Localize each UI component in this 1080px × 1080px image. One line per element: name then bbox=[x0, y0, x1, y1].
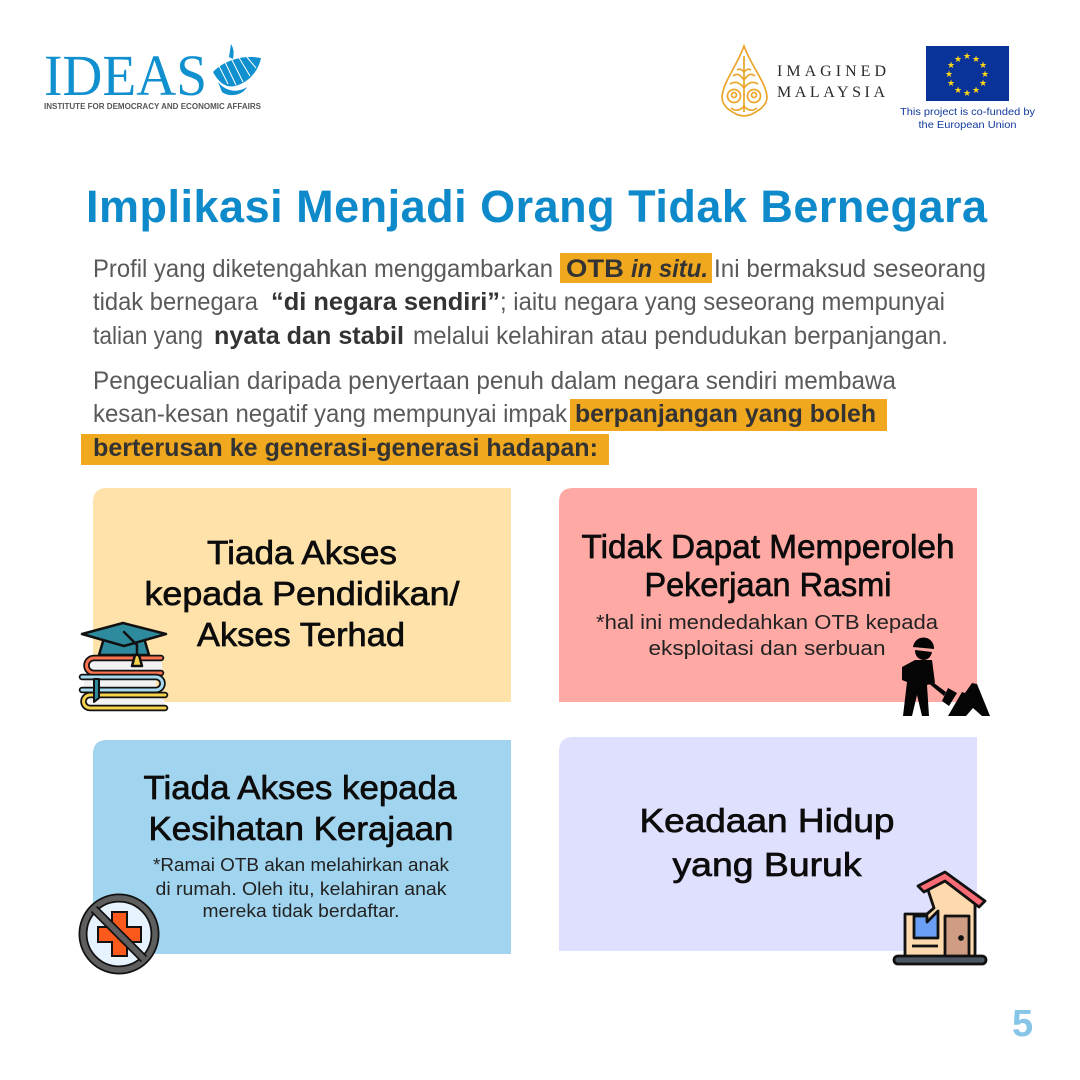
logo: Imagined Malaysia bbox=[722, 46, 886, 116]
logo: Imagined Malaysia: MALAYSIA bbox=[777, 84, 885, 101]
panel: healthcare bbox=[83, 740, 511, 970]
text: EU co-funding note: the European Union bbox=[918, 119, 1017, 131]
text block: intro paragraph: OTB bbox=[566, 255, 624, 283]
note: home births: *Ramai OTB akan melahirkan anak bbox=[153, 855, 450, 875]
text: EU co-funding note: This project is co-funded by bbox=[900, 106, 1036, 118]
icon: EU stars: ★ bbox=[945, 69, 953, 79]
logo: Imagined Malaysia: IMAGINED bbox=[777, 63, 886, 80]
heading: education: kepada Pendidikan/ bbox=[144, 575, 460, 612]
text block: exclusion paragraph: Pengecualian daripada penyertaan penuh dalam negara sendiri membawa bbox=[93, 367, 896, 395]
text block: intro paragraph bbox=[93, 253, 986, 350]
title: Implikasi Menjadi Orang Tidak Bernegara bbox=[86, 181, 988, 232]
icon: EU stars: ★ bbox=[963, 51, 971, 61]
note: exploitation: eksploitasi dan serbuan bbox=[648, 638, 886, 660]
heading: healthcare: Kesihatan Kerajaan bbox=[148, 810, 454, 847]
heading: education: Akses Terhad bbox=[197, 616, 405, 653]
heading: living conditions: yang Buruk bbox=[672, 846, 862, 883]
panel: employment bbox=[559, 488, 990, 716]
text block: intro paragraph: ; iaitu negara yang seseorang mempunyai bbox=[500, 288, 945, 316]
icon: golden wayang leaf bbox=[722, 46, 767, 116]
text block: intro paragraph: in situ. bbox=[631, 255, 708, 283]
icon: EU stars bbox=[945, 51, 989, 98]
text block: exclusion paragraph: berterusan ke generasi-generasi hadapan: bbox=[93, 434, 598, 462]
panel: living conditions bbox=[559, 737, 986, 964]
highlight: OTB in situ bbox=[560, 253, 712, 283]
text block: intro paragraph: melalui kelahiran atau pendudukan berpanjangan. bbox=[413, 322, 948, 350]
icon: EU stars: ★ bbox=[963, 88, 971, 98]
highlight: lasting impact bbox=[81, 399, 887, 465]
heading: education bbox=[144, 534, 460, 653]
heading: healthcare bbox=[144, 769, 457, 847]
note: home births: di rumah. Oleh itu, kelahiran anak bbox=[156, 879, 448, 899]
note: home births bbox=[153, 855, 450, 921]
logo: IDEAS: INSTITUTE FOR DEMOCRACY AND ECONOMIC AFFAIRS bbox=[44, 102, 262, 111]
icon: EU stars: ★ bbox=[972, 85, 980, 95]
icon: EU stars: ★ bbox=[954, 85, 962, 95]
heading: living conditions: Keadaan Hidup bbox=[640, 802, 894, 839]
heading: employment: Tidak Dapat Memperoleh bbox=[582, 528, 954, 565]
note: home births: mereka tidak berdaftar. bbox=[202, 901, 400, 921]
text block: exclusion paragraph: berpanjangan yang boleh bbox=[575, 400, 876, 428]
text block: exclusion paragraph: kesan-kesan negatif yang mempunyai impak bbox=[93, 400, 567, 428]
panel: education bbox=[82, 488, 511, 708]
note: exploitation bbox=[596, 612, 939, 660]
icon: construction worker with shovel bbox=[902, 638, 990, 716]
text block: exclusion paragraph bbox=[81, 367, 896, 465]
text: EU co-funding note bbox=[900, 106, 1036, 131]
icon: EU stars: ★ bbox=[979, 78, 987, 88]
icon: broken house bbox=[894, 872, 986, 964]
text block: intro paragraph: Profil yang diketengahkan menggambarkan bbox=[93, 255, 553, 283]
icon: IDEAS bird bbox=[213, 44, 261, 95]
logo: IDEAS: IDEAS bbox=[44, 43, 207, 108]
heading: employment bbox=[582, 528, 954, 603]
text block: intro paragraph: nyata dan stabil bbox=[214, 322, 404, 350]
page number: 5 bbox=[1012, 1003, 1033, 1045]
logo: EU flag bbox=[926, 46, 1009, 101]
icon: graduation cap on books bbox=[82, 623, 166, 708]
icon: no healthcare sign bbox=[83, 898, 155, 970]
icon: EU stars: ★ bbox=[979, 60, 987, 70]
icon: EU stars: ★ bbox=[947, 60, 955, 70]
text block: intro paragraph: Ini bermaksud seseorang bbox=[714, 255, 986, 283]
heading: education: Tiada Akses bbox=[207, 534, 397, 571]
text block: intro paragraph: “di negara sendiri” bbox=[271, 288, 500, 316]
icon: EU stars: ★ bbox=[954, 54, 962, 64]
heading: employment: Pekerjaan Rasmi bbox=[644, 566, 892, 603]
icon: EU stars: ★ bbox=[972, 54, 980, 64]
note: exploitation: *hal ini mendedahkan OTB kepada bbox=[596, 612, 939, 634]
icon: EU stars: ★ bbox=[947, 78, 955, 88]
icon: EU stars: ★ bbox=[981, 69, 989, 79]
text block: intro paragraph: tidak bernegara bbox=[93, 288, 258, 316]
text block: intro paragraph: talian yang bbox=[93, 322, 203, 350]
heading: healthcare: Tiada Akses kepada bbox=[144, 769, 457, 806]
heading: living conditions bbox=[640, 802, 894, 883]
